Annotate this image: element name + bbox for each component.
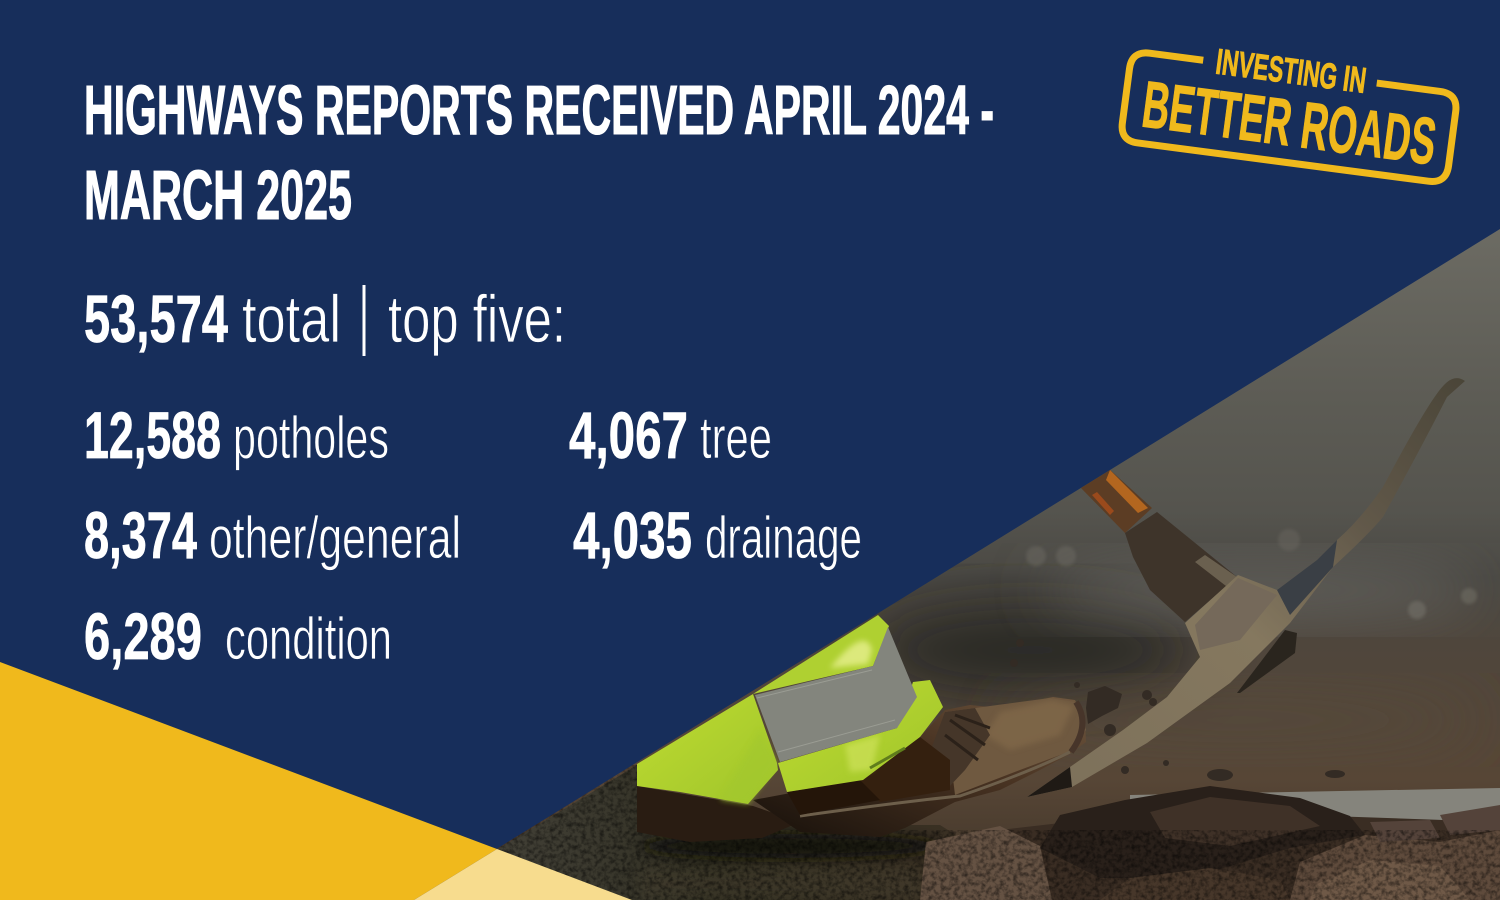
photo: hi-vis trousers bbox=[637, 615, 943, 804]
yellow corner triangle bbox=[0, 662, 497, 900]
total line: 53,574 total | top five: top five: bbox=[388, 282, 566, 357]
photo: flying dirt clods bbox=[1074, 682, 1345, 781]
stat: potholes: 12,588 bbox=[84, 398, 221, 472]
stat: other/general: other/general bbox=[209, 505, 461, 571]
stat: tree: tree bbox=[700, 405, 772, 471]
total line: 53,574 total | top five bbox=[84, 282, 566, 357]
stat: drainage: 4,035 bbox=[573, 498, 692, 572]
photo: pickaxe bbox=[1027, 378, 1465, 797]
stat: drainage: drainage bbox=[705, 505, 862, 571]
stat: drainage bbox=[573, 498, 862, 572]
total line: 53,574 total | top five: 53,574 bbox=[84, 282, 228, 357]
total line: 53,574 total | top five: total bbox=[242, 282, 341, 357]
stat: potholes bbox=[84, 398, 389, 472]
photo: blurred road surface bbox=[414, 229, 1500, 900]
photo: front boot bbox=[753, 697, 1086, 837]
title: MARCH 2025 bbox=[84, 156, 352, 234]
stat: condition: 6,289 bbox=[84, 599, 202, 673]
stamp border bbox=[1120, 51, 1458, 184]
stat: condition bbox=[84, 599, 392, 673]
photo: reflective ankle band bbox=[755, 627, 917, 762]
photo: boot and pickaxe breaking ground bbox=[414, 229, 1500, 900]
stat: other/general: 8,374 bbox=[84, 498, 197, 572]
stat: other/general bbox=[84, 498, 461, 572]
photo: wet strip behind the dirt bbox=[1130, 788, 1500, 822]
photo: muddy ground on the right bbox=[920, 786, 1500, 900]
photo: ground grain bbox=[414, 765, 1500, 900]
stat: potholes: potholes bbox=[233, 405, 389, 471]
stamp text: investing in: INVESTING IN bbox=[1214, 41, 1369, 101]
photo: dark textured ground on the left bbox=[498, 765, 956, 900]
stat: condition: condition bbox=[225, 606, 392, 672]
pale yellow triangle bbox=[414, 849, 632, 900]
title bbox=[84, 71, 994, 234]
stat: tree: 4,067 bbox=[569, 398, 688, 472]
photo: back boot heel bbox=[637, 786, 800, 842]
stamp badge: investing in better roads bbox=[1120, 30, 1461, 184]
